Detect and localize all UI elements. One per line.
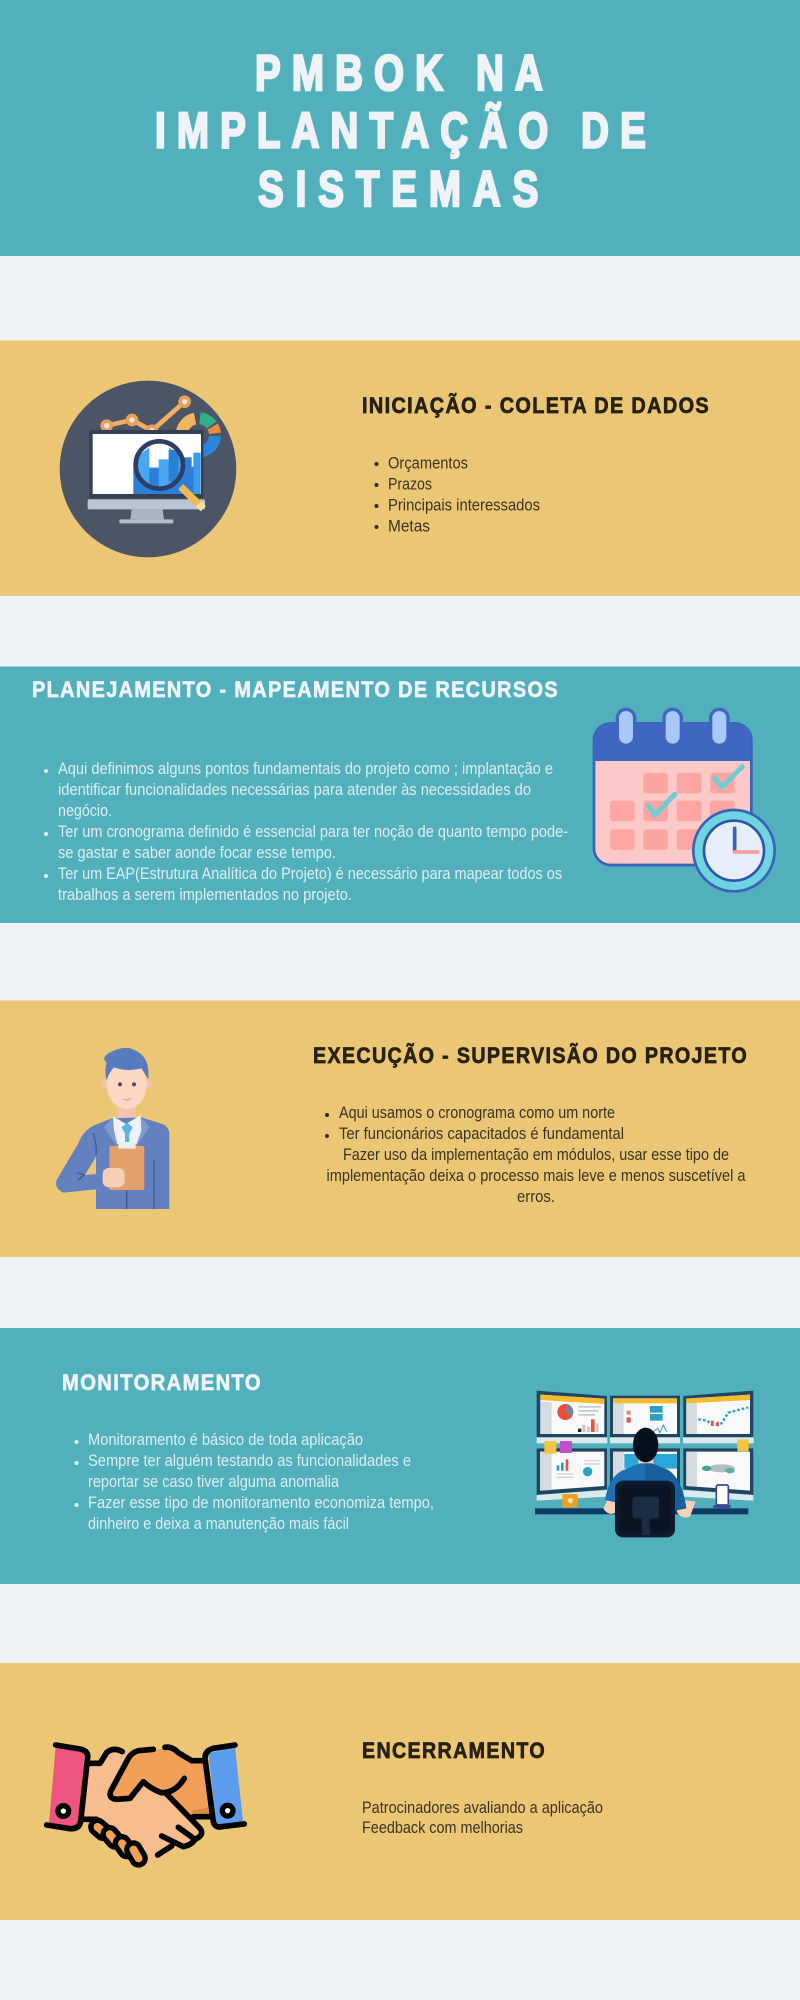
list: monitoramento: Monitoramento é básico de toda aplicação — [88, 1430, 363, 1449]
list: execução: Fazer uso da implementação em módulos, usar esse tipo de — [343, 1145, 729, 1164]
list: planejamento: Aqui definimos alguns pontos fundamentais do projeto como ; implantação e — [58, 759, 553, 778]
list: iniciação: Principais interessados — [388, 496, 540, 514]
panel: title header — [0, 0, 800, 256]
icon: calendar with clock — [594, 709, 775, 891]
icon: operator at monitors — [535, 1391, 754, 1537]
list: planejamento: trabalhos a serem implementados no projeto. — [58, 885, 352, 904]
title: IMPLANTAÇÃO DE — [155, 103, 657, 159]
title — [155, 46, 657, 217]
panel: execução — [0, 1000, 800, 1257]
list: execução: erros. — [517, 1187, 555, 1206]
heading: execução: EXECUÇÃO - SUPERVISÃO DO PROJETO — [313, 1043, 748, 1068]
list: iniciação: Metas — [388, 516, 430, 536]
icon: man with clipboard — [56, 1048, 169, 1209]
list: planejamento: Ter um cronograma definido é essencial para ter noção de quanto tempo pode- — [58, 822, 568, 841]
panel: encerramento — [0, 1663, 800, 1920]
list: iniciação: Orçamentos — [388, 454, 468, 472]
list: planejamento: negócio. — [58, 801, 112, 820]
text: encerramento: Feedback com melhorias — [362, 1818, 523, 1837]
text: encerramento: Patrocinadores avaliando a aplicação — [362, 1798, 603, 1817]
icon: handshake — [47, 1745, 244, 1867]
list: iniciação — [374, 454, 540, 536]
list: monitoramento: Sempre ter alguém testando as funcionalidades e — [88, 1451, 411, 1470]
heading: encerramento: ENCERRAMENTO — [362, 1738, 546, 1763]
list: monitoramento: Fazer esse tipo de monitoramento economiza tempo, — [88, 1493, 434, 1512]
text: encerramento — [362, 1798, 603, 1837]
list: monitoramento — [74, 1430, 434, 1533]
list: execução — [325, 1103, 746, 1206]
title: SISTEMAS — [258, 162, 550, 217]
list: monitoramento: reportar se caso tiver alguma anomalia — [88, 1472, 339, 1491]
panel: monitoramento — [0, 1328, 800, 1584]
heading: monitoramento: MONITORAMENTO — [62, 1370, 262, 1395]
icon: monitor with magnifier — [60, 381, 236, 557]
list: planejamento: identificar funcionalidades necessárias para atender às necessidades do — [58, 780, 531, 799]
list: planejamento — [44, 759, 568, 904]
list: monitoramento: dinheiro e deixa a manutenção mais fácil — [88, 1514, 349, 1533]
list: execução: Aqui usamos o cronograma como um norte — [339, 1103, 615, 1122]
list: planejamento: Ter um EAP(Estrutura Analítica do Projeto) é necessário para mapear todos os — [58, 864, 562, 883]
list: iniciação: Prazos — [388, 474, 432, 494]
heading: planejamento: PLANEJAMENTO - MAPEAMENTO DE RECURSOS — [32, 677, 559, 702]
title: PMBOK NA — [255, 46, 554, 101]
panel: iniciação — [0, 340, 800, 596]
list: planejamento: se gastar e saber aonde focar esse tempo. — [58, 843, 336, 862]
list: execução: Ter funcionários capacitados é fundamental — [339, 1124, 624, 1143]
heading: iniciação: INICIAÇÃO - COLETA DE DADOS — [362, 393, 710, 418]
panel: planejamento — [0, 666, 800, 923]
